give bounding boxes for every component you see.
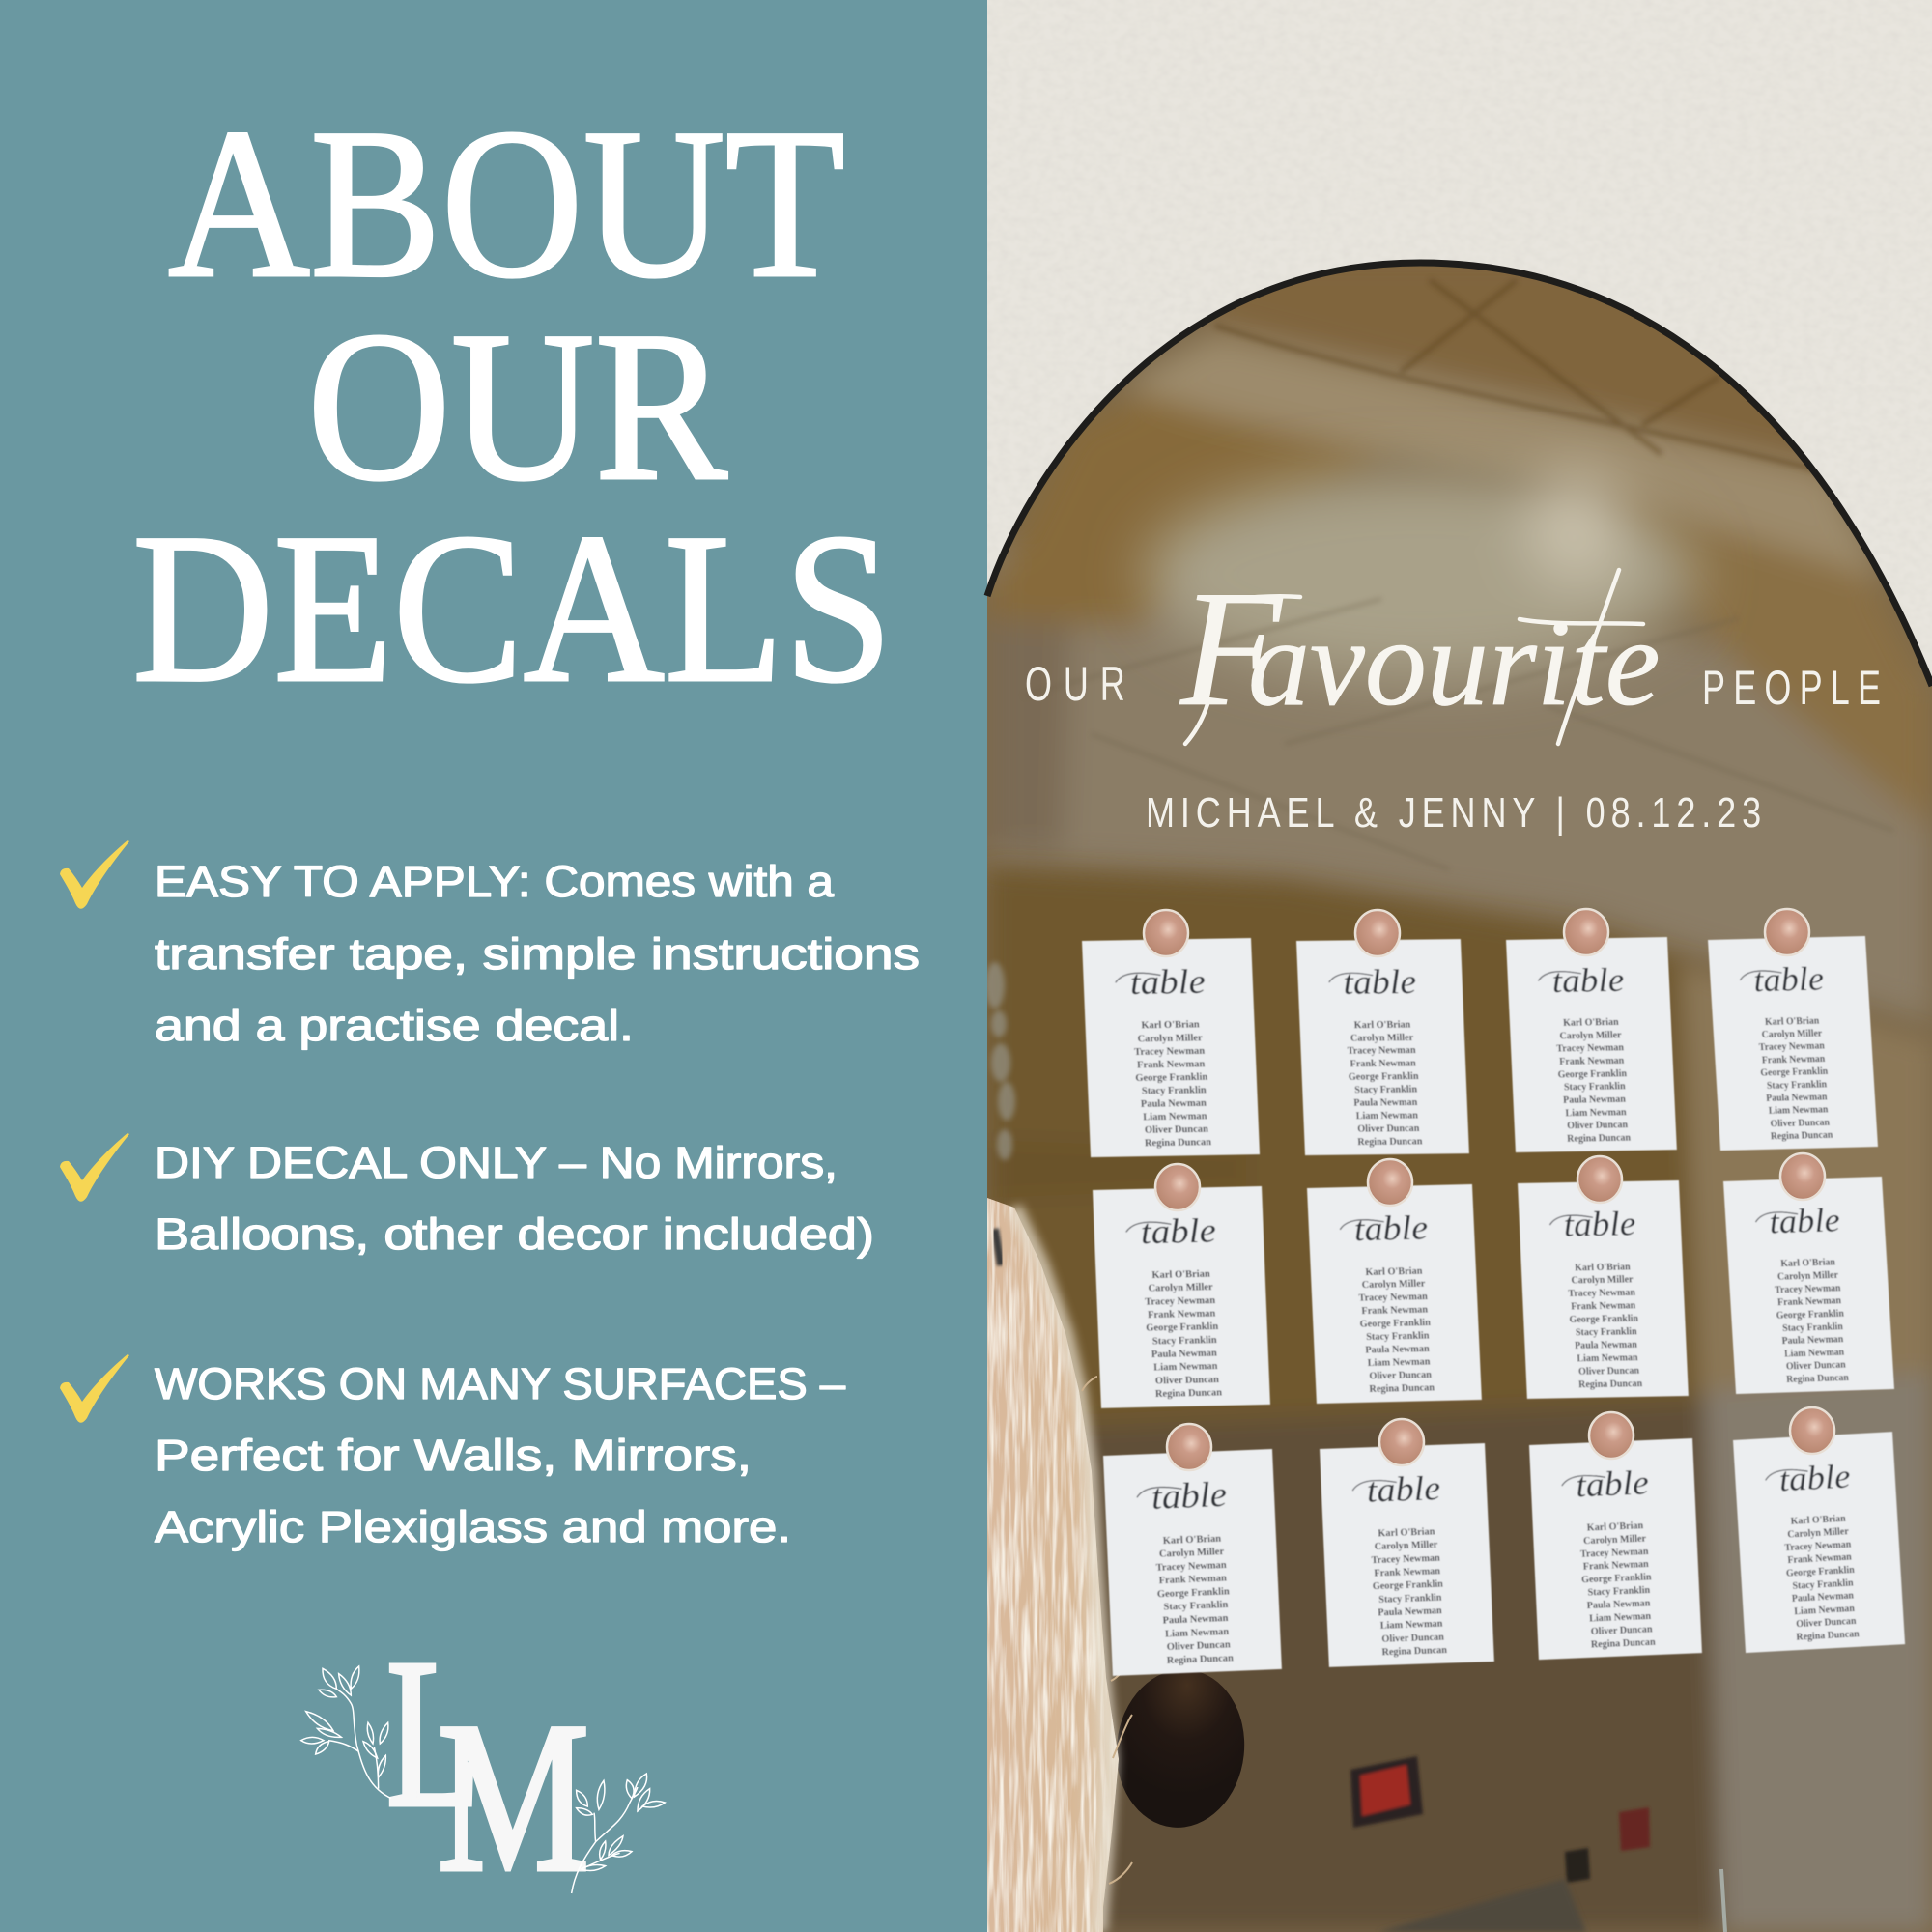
card row 3 col 3: Liam Newman bbox=[1589, 1611, 1652, 1625]
card row 2 col 4: table bbox=[1768, 1202, 1841, 1241]
card row 2 col 4: George Franklin bbox=[1776, 1308, 1845, 1321]
card row 3 col 1: Oliver Duncan bbox=[1167, 1639, 1231, 1653]
photo: wall and arched mirror bbox=[985, 0, 1932, 1932]
card row 3 col 3: Regina Duncan bbox=[1591, 1637, 1656, 1650]
card row 1 col 4: Tracey Newman bbox=[1759, 1041, 1826, 1053]
card row 1 col 1: Karl O'Brian bbox=[1141, 1020, 1200, 1032]
card row 2 col 3: Oliver Duncan bbox=[1578, 1366, 1640, 1378]
card row 2 col 4: Liam Newman bbox=[1784, 1347, 1845, 1360]
card row 1 col 2: Tracey Newman bbox=[1348, 1045, 1416, 1057]
card row 2 col 2: Stacy Franklin bbox=[1366, 1331, 1430, 1343]
card row 1 col 3: Tracey Newman bbox=[1556, 1042, 1625, 1055]
card row 3 col 4: Karl O'Brian bbox=[1790, 1514, 1846, 1527]
stray pampas fibres bbox=[1082, 1377, 1132, 1884]
card row 2 col 3: Regina Duncan bbox=[1578, 1378, 1643, 1391]
card row 3 col 1: Paula Newman bbox=[1162, 1613, 1229, 1627]
card row 1 col 3 bbox=[1506, 937, 1677, 1152]
bullet: easy to apply bbox=[60, 840, 920, 1050]
card row 2 col 1: Regina Duncan bbox=[1155, 1387, 1222, 1400]
card row 3 col 2: Stacy Franklin bbox=[1378, 1592, 1442, 1605]
card row 1 col 4: Stacy Franklin bbox=[1767, 1079, 1828, 1092]
card row 2 col 3: Carolyn Miller bbox=[1571, 1274, 1634, 1287]
card row 3 col 1: Frank Newman bbox=[1158, 1574, 1227, 1586]
card row 1 col 3: George Franklin bbox=[1557, 1068, 1628, 1080]
card row 3 col 4: table bbox=[1778, 1458, 1852, 1498]
doorway reflection bbox=[1378, 1879, 1586, 1932]
card row 2 col 4: Oliver Duncan bbox=[1786, 1360, 1846, 1373]
card row 1 col 2: George Franklin bbox=[1349, 1071, 1419, 1083]
seating cards bbox=[1082, 936, 1905, 1676]
card row 1 col 3: Paula Newman bbox=[1563, 1094, 1626, 1106]
card row 3 col 2 bbox=[1320, 1443, 1494, 1667]
card row 2 col 3: George Franklin bbox=[1569, 1314, 1639, 1325]
card row 2 col 4: Karl O'Brian bbox=[1780, 1257, 1836, 1269]
pampas grass bbox=[987, 1198, 1119, 1932]
card row 2 col 2: Regina Duncan bbox=[1369, 1383, 1435, 1395]
card row 1 col 1: Oliver Duncan bbox=[1145, 1124, 1208, 1136]
card row 3 col 3: George Franklin bbox=[1581, 1572, 1652, 1586]
card row 3 col 4: Regina Duncan bbox=[1796, 1629, 1860, 1643]
decal lettering bbox=[1025, 557, 1881, 837]
card row 1 col 3: Carolyn Miller bbox=[1559, 1030, 1622, 1041]
card row 3 col 2: Tracey Newman bbox=[1371, 1552, 1440, 1566]
decal word: PEOPLE: PEOPLE bbox=[1702, 662, 1881, 715]
card row 2 col 4: Carolyn Miller bbox=[1777, 1270, 1839, 1283]
card row 1 col 2: Regina Duncan bbox=[1357, 1136, 1423, 1148]
card row 3 col 3: Frank Newman bbox=[1583, 1559, 1649, 1573]
card row 1 col 3: Oliver Duncan bbox=[1567, 1120, 1629, 1131]
card row 3 col 3 bbox=[1529, 1438, 1702, 1660]
card row 3 col 3: Carolyn Miller bbox=[1583, 1533, 1647, 1547]
card row 1 col 1: Carolyn Miller bbox=[1137, 1033, 1203, 1044]
card row 1 col 2: Frank Newman bbox=[1350, 1059, 1416, 1070]
decal word: Favourite: F bbox=[1179, 557, 1284, 741]
card row 2 col 2 bbox=[1307, 1184, 1482, 1404]
card row 3 col 4: Stacy Franklin bbox=[1792, 1577, 1854, 1592]
card row 2 col 2: Liam Newman bbox=[1368, 1357, 1431, 1369]
card row 2 col 3: Frank Newman bbox=[1571, 1300, 1636, 1313]
card row 2 col 4: Stacy Franklin bbox=[1782, 1321, 1843, 1334]
text: easy to apply: EASY TO APPLY: Comes with a bbox=[155, 857, 835, 906]
card row 1 col 3: Liam Newman bbox=[1565, 1107, 1627, 1119]
exit sign reflection bbox=[1350, 1756, 1423, 1828]
card row 1 col 3: Karl O'Brian bbox=[1563, 1017, 1619, 1029]
card row 1 col 1: George Franklin bbox=[1135, 1072, 1208, 1084]
card row 1 col 1: Frank Newman bbox=[1137, 1059, 1206, 1070]
card row 3 col 3: Stacy Franklin bbox=[1587, 1585, 1651, 1599]
icon: left leaf sprig bbox=[301, 1666, 391, 1799]
card row 1 col 1: Paula Newman bbox=[1141, 1098, 1207, 1110]
card row 1 col 4: Liam Newman bbox=[1768, 1104, 1829, 1117]
card row 2 col 1: Tracey Newman bbox=[1145, 1295, 1215, 1308]
title: about our decals bbox=[132, 85, 893, 727]
card row 2 col 2: Oliver Duncan bbox=[1369, 1370, 1432, 1382]
card row 2 col 1: Stacy Franklin bbox=[1152, 1335, 1217, 1347]
card row 1 col 2 bbox=[1296, 939, 1469, 1155]
card row 3 col 2: Liam Newman bbox=[1380, 1619, 1443, 1632]
logo letter M: M bbox=[438, 1679, 589, 1917]
card row 3 col 2: Regina Duncan bbox=[1381, 1645, 1447, 1658]
wax seals bbox=[1144, 909, 1834, 1470]
card row 3 col 1: Regina Duncan bbox=[1167, 1653, 1234, 1666]
text: works on many surfaces: Perfect for Walls, Mirrors, bbox=[155, 1431, 752, 1480]
card row 3 col 2: Oliver Duncan bbox=[1381, 1632, 1444, 1645]
card row 3 col 4: George Franklin bbox=[1786, 1565, 1855, 1579]
text: diy decal only: DIY DECAL ONLY – No Mirrors, bbox=[155, 1138, 838, 1187]
card row 3 col 3: Tracey Newman bbox=[1580, 1547, 1649, 1560]
card row 2 col 2: George Franklin bbox=[1360, 1318, 1431, 1330]
card row 1 col 2: Stacy Franklin bbox=[1354, 1085, 1418, 1095]
card row 3 col 2: Karl O'Brian bbox=[1378, 1526, 1435, 1539]
card row 3 col 2: Frank Newman bbox=[1374, 1566, 1440, 1579]
card row 1 col 2: Paula Newman bbox=[1353, 1097, 1418, 1109]
card row 1 col 2: Karl O'Brian bbox=[1354, 1019, 1411, 1031]
card row 2 col 1: table bbox=[1140, 1210, 1217, 1251]
card row 1 col 3: Frank Newman bbox=[1559, 1056, 1625, 1067]
logo letter L: L bbox=[386, 1615, 481, 1851]
card row 3 col 3: Oliver Duncan bbox=[1591, 1624, 1653, 1637]
decal word: OUR: OUR bbox=[1025, 658, 1125, 711]
mirror black rim bbox=[987, 263, 1932, 686]
card row 3 col 3: table bbox=[1575, 1463, 1650, 1504]
card row 3 col 1: Tracey Newman bbox=[1155, 1560, 1227, 1574]
card row 2 col 3: Tracey Newman bbox=[1568, 1288, 1636, 1299]
card row 1 col 4: Frank Newman bbox=[1762, 1054, 1826, 1066]
card row 3 col 2: Carolyn Miller bbox=[1375, 1540, 1438, 1552]
card row 3 col 1: Liam Newman bbox=[1165, 1627, 1230, 1639]
card row 1 col 3: Stacy Franklin bbox=[1564, 1081, 1626, 1094]
card row 2 col 1: Frank Newman bbox=[1148, 1309, 1216, 1321]
icon: right leaf sprig bbox=[572, 1774, 665, 1893]
card row 3 col 3: Paula Newman bbox=[1587, 1598, 1651, 1611]
card row 2 col 1: Liam Newman bbox=[1153, 1361, 1218, 1374]
card row 3 col 2: Paula Newman bbox=[1378, 1605, 1442, 1618]
card row 3 col 1: George Franklin bbox=[1157, 1586, 1230, 1600]
card row 3 col 4: Oliver Duncan bbox=[1796, 1616, 1857, 1631]
text: diy decal only: Balloons, other decor included) bbox=[155, 1209, 874, 1259]
text: easy to apply: and a practise decal. bbox=[155, 1001, 634, 1050]
card row 1 col 3: table bbox=[1551, 960, 1625, 1000]
card row 1 col 3: Regina Duncan bbox=[1567, 1132, 1632, 1145]
card row 1 col 1: Tracey Newman bbox=[1134, 1046, 1206, 1058]
card row 1 col 2: Liam Newman bbox=[1355, 1110, 1418, 1122]
card row 1 col 4: George Franklin bbox=[1760, 1066, 1829, 1079]
title: about our decals: OUR bbox=[307, 288, 727, 526]
card row 3 col 4: Tracey Newman bbox=[1784, 1539, 1852, 1553]
card row 1 col 1: table bbox=[1129, 962, 1207, 1002]
card row 3 col 4: Paula Newman bbox=[1792, 1590, 1855, 1605]
decal word: Favourite: avourite bbox=[1248, 594, 1661, 731]
card row 3 col 4: Carolyn Miller bbox=[1787, 1526, 1849, 1541]
card row 2 col 3: Liam Newman bbox=[1577, 1352, 1638, 1365]
card row 1 col 4: Paula Newman bbox=[1766, 1092, 1828, 1104]
reflected ceiling lines bbox=[1215, 280, 1831, 473]
card row 2 col 4: Regina Duncan bbox=[1786, 1373, 1850, 1385]
card row 3 col 1: Karl O'Brian bbox=[1163, 1533, 1221, 1547]
text: diy decal only bbox=[155, 1138, 874, 1259]
text: easy to apply bbox=[155, 857, 920, 1050]
bullet list bbox=[60, 840, 920, 1551]
text: works on many surfaces bbox=[155, 1359, 845, 1551]
card row 3 col 4: Liam Newman bbox=[1794, 1604, 1856, 1617]
card row 1 col 2: table bbox=[1343, 963, 1417, 1002]
title: about our decals: ABOUT bbox=[168, 85, 845, 323]
text: works on many surfaces: Acrylic Plexiglass and more. bbox=[155, 1502, 791, 1551]
card row 1 col 2: Carolyn Miller bbox=[1350, 1033, 1414, 1044]
card row 2 col 2: Tracey Newman bbox=[1358, 1292, 1428, 1304]
wall background bbox=[987, 0, 1932, 966]
card row 3 col 1 bbox=[1103, 1449, 1282, 1676]
card row 2 col 1 bbox=[1093, 1186, 1270, 1408]
card row 2 col 2: Carolyn Miller bbox=[1362, 1279, 1426, 1291]
left teal panel bbox=[0, 0, 987, 1932]
card row 2 col 1: Oliver Duncan bbox=[1155, 1375, 1219, 1386]
card row 2 col 3: Stacy Franklin bbox=[1576, 1326, 1637, 1339]
script swashes on Favourite bbox=[1185, 570, 1643, 744]
card row 1 col 4: Regina Duncan bbox=[1771, 1130, 1833, 1143]
card row 2 col 1: Carolyn Miller bbox=[1148, 1282, 1213, 1294]
icon: yellow check 3 bbox=[60, 1354, 129, 1423]
card row 2 col 3: Paula Newman bbox=[1575, 1340, 1637, 1351]
card row 1 col 4: Karl O'Brian bbox=[1765, 1015, 1820, 1028]
card row 3 col 2: George Franklin bbox=[1373, 1579, 1443, 1592]
card row 2 col 4: Frank Newman bbox=[1777, 1295, 1842, 1308]
card row 2 col 4: Paula Newman bbox=[1781, 1334, 1844, 1347]
card row 2 col 1: Karl O'Brian bbox=[1151, 1269, 1210, 1281]
mirror reflection bbox=[985, 251, 1932, 1932]
card row 1 col 1: Stacy Franklin bbox=[1142, 1085, 1207, 1096]
card row 1 col 1: Regina Duncan bbox=[1145, 1137, 1211, 1150]
card row 2 col 1: George Franklin bbox=[1146, 1321, 1219, 1334]
card row 2 col 3: table bbox=[1563, 1205, 1636, 1244]
crystal reflections bbox=[985, 962, 1015, 1160]
decal names and date: MICHAEL & JENNY | 08.12.23 bbox=[1146, 789, 1761, 837]
card row 2 col 2: Karl O'Brian bbox=[1365, 1265, 1423, 1278]
icon: yellow check 2 bbox=[60, 1133, 129, 1202]
card row 3 col 4: Frank Newman bbox=[1787, 1551, 1852, 1566]
card row 1 col 2: Oliver Duncan bbox=[1357, 1123, 1420, 1135]
small dark fixture reflection bbox=[1565, 1848, 1590, 1883]
card row 2 col 2: table bbox=[1353, 1208, 1429, 1248]
fire alarm reflection bbox=[1619, 1807, 1650, 1851]
card row 2 col 4: Tracey Newman bbox=[1775, 1283, 1841, 1295]
dark oval reflection bbox=[1117, 1672, 1244, 1828]
text: works on many surfaces: WORKS ON MANY SURFACES – bbox=[155, 1359, 845, 1408]
card row 1 col 1 bbox=[1082, 938, 1260, 1157]
card row 1 col 4: Carolyn Miller bbox=[1761, 1028, 1823, 1040]
card row 3 col 1: Carolyn Miller bbox=[1159, 1547, 1225, 1560]
card row 3 col 1: table bbox=[1151, 1475, 1228, 1517]
bullet: works on many surfaces bbox=[60, 1354, 845, 1551]
logo: LM monogram with leaves bbox=[301, 1615, 665, 1917]
card row 2 col 4 bbox=[1723, 1177, 1894, 1394]
bullet: diy decal only bbox=[60, 1133, 874, 1259]
card row 2 col 3: Karl O'Brian bbox=[1575, 1262, 1631, 1273]
card row 3 col 4 bbox=[1733, 1432, 1905, 1653]
card row 2 col 2: Paula Newman bbox=[1365, 1344, 1430, 1356]
card row 3 col 2: table bbox=[1366, 1468, 1441, 1510]
card row 2 col 3 bbox=[1518, 1180, 1689, 1399]
card row 1 col 1: Liam Newman bbox=[1143, 1111, 1208, 1122]
reflected wall lines bbox=[1219, 597, 1596, 667]
card row 3 col 1: Stacy Franklin bbox=[1163, 1600, 1229, 1613]
card row 2 col 1: Paula Newman bbox=[1151, 1348, 1217, 1360]
card row 3 col 3: Karl O'Brian bbox=[1587, 1520, 1644, 1534]
card row 2 col 2: Frank Newman bbox=[1361, 1305, 1429, 1317]
icon: yellow check 1 bbox=[60, 840, 129, 909]
decal word: Favourite bbox=[1179, 557, 1661, 744]
card row 1 col 4: Oliver Duncan bbox=[1770, 1118, 1831, 1129]
card row 1 col 4 bbox=[1708, 936, 1878, 1151]
card row 1 col 4: table bbox=[1752, 960, 1825, 999]
text: easy to apply: transfer tape, simple instructions bbox=[155, 929, 920, 979]
title: about our decals: DECALS bbox=[132, 490, 893, 727]
